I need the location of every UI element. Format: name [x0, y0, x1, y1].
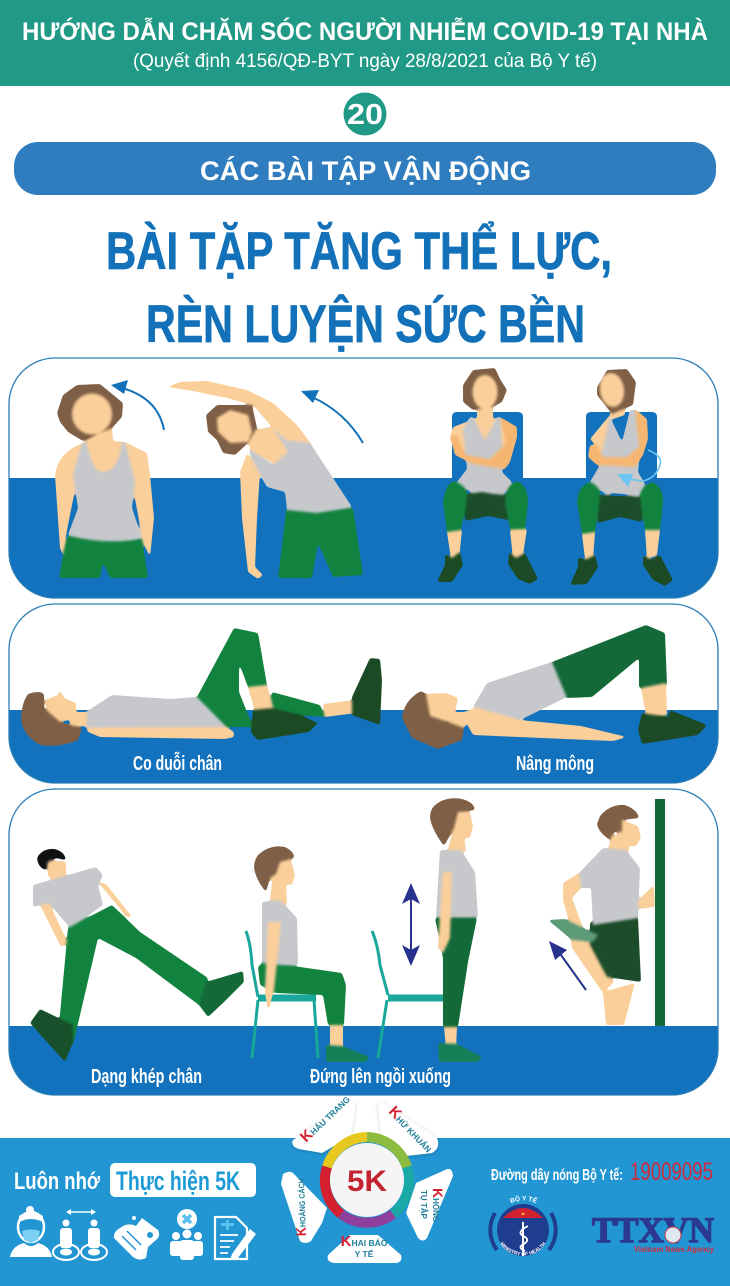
reminder pill: Thực hiện 5K	[116, 1166, 240, 1196]
chair: standing	[372, 931, 445, 1058]
petal: health declaration: KHAI BÁO	[341, 1233, 388, 1250]
main title: RÈN LUYỆN SỨC BỀN	[146, 293, 585, 354]
petal: no gathering	[406, 1169, 453, 1240]
logo: Ministry of Health	[488, 1195, 558, 1256]
header band	[0, 0, 730, 86]
figure: knee bend	[21, 628, 382, 746]
section pill	[14, 142, 716, 195]
icon: distancing	[53, 1209, 107, 1260]
arrow: up and down	[402, 883, 420, 966]
icon: avoid gatherings	[170, 1209, 203, 1260]
logo: TTXVN: Vietnam News Agency	[634, 1245, 715, 1254]
hotline: Đường dây nóng Bộ Y tế:	[491, 1167, 623, 1184]
petal: distance	[281, 1172, 327, 1243]
diagram: 5K flower	[281, 1090, 453, 1263]
panel: lying exercises	[9, 604, 718, 783]
figure: chair standing woman	[430, 798, 482, 1062]
logo: Ministry of Health: BỘ Y TẾ	[510, 1195, 538, 1204]
section pill: CÁC BÀI TẬP VẬN ĐỘNG	[200, 155, 531, 186]
petal: distance: KHOẢNG CÁCH	[291, 1178, 309, 1236]
panel: standing exercises	[9, 789, 718, 1095]
post: wall bar	[655, 799, 665, 1026]
ring centre	[330, 1143, 404, 1217]
header title: HƯỚNG DẪN CHĂM SÓC NGƯỜI NHIỄM COVID-19 TẠI NHÀ	[22, 16, 708, 46]
figure: seated twist front	[437, 368, 538, 584]
figure: chair sitting woman	[254, 846, 370, 1062]
petal: mask: KHẨU TRANG	[297, 1090, 354, 1146]
petal: no gathering: TỤ TẬP	[419, 1190, 428, 1220]
chair back: side twist	[586, 412, 657, 478]
diagram: 5K flower: 5K	[347, 1165, 387, 1198]
figure: seated twist side	[570, 369, 673, 586]
arrow: twist rotation	[617, 450, 660, 487]
figure: quad stretch	[548, 805, 655, 1025]
footer band	[0, 1138, 730, 1286]
number badge	[344, 92, 386, 136]
chair back: front-facing twist	[452, 412, 523, 478]
hotline	[491, 1158, 713, 1186]
arrow: head tilt direction	[111, 380, 164, 430]
arrow: side bend direction	[301, 390, 363, 443]
chair: sitting	[246, 931, 318, 1058]
label: stand and sit: Đứng lên ngồi xuống	[310, 1066, 451, 1088]
icon: hand washing	[114, 1216, 159, 1260]
reminder text: Luôn nhớ	[14, 1168, 101, 1195]
main title	[106, 221, 612, 354]
panel: neck and torso stretches	[9, 358, 718, 598]
icon: mask	[10, 1206, 52, 1257]
figure: head tilt	[55, 384, 154, 578]
figure: hip lift	[402, 625, 707, 749]
logo: Ministry of Health: MINISTRY OF HEALTH	[500, 1242, 546, 1256]
petal: health declaration	[328, 1233, 401, 1263]
ring: five colour segments	[325, 1137, 409, 1223]
header subtitle: (Quyết định 4156/QĐ-BYT ngày 28/8/2021 của Bộ Y tế)	[133, 51, 597, 72]
figure: leg swing	[30, 849, 244, 1062]
label: hip lift: Nâng mông	[516, 753, 594, 775]
number badge: 20	[347, 99, 383, 131]
petal: no gathering: K HÔNG	[430, 1188, 446, 1222]
icon: health declaration form	[215, 1217, 256, 1260]
main title: BÀI TẶP TĂNG THỂ LỰC,	[106, 221, 612, 281]
petal: disinfect: KHỬ KHUẨN	[385, 1103, 437, 1156]
arrow: leg raise direction	[549, 941, 586, 990]
figure: side bend	[167, 381, 363, 579]
label: leg swing: Dạng khép chân	[91, 1066, 202, 1088]
label: knee bend: Co duỗi chân	[133, 751, 222, 775]
logo: TTXVN: TTXVN	[592, 1210, 714, 1250]
petal: health declaration: Y TẾ	[355, 1249, 374, 1259]
